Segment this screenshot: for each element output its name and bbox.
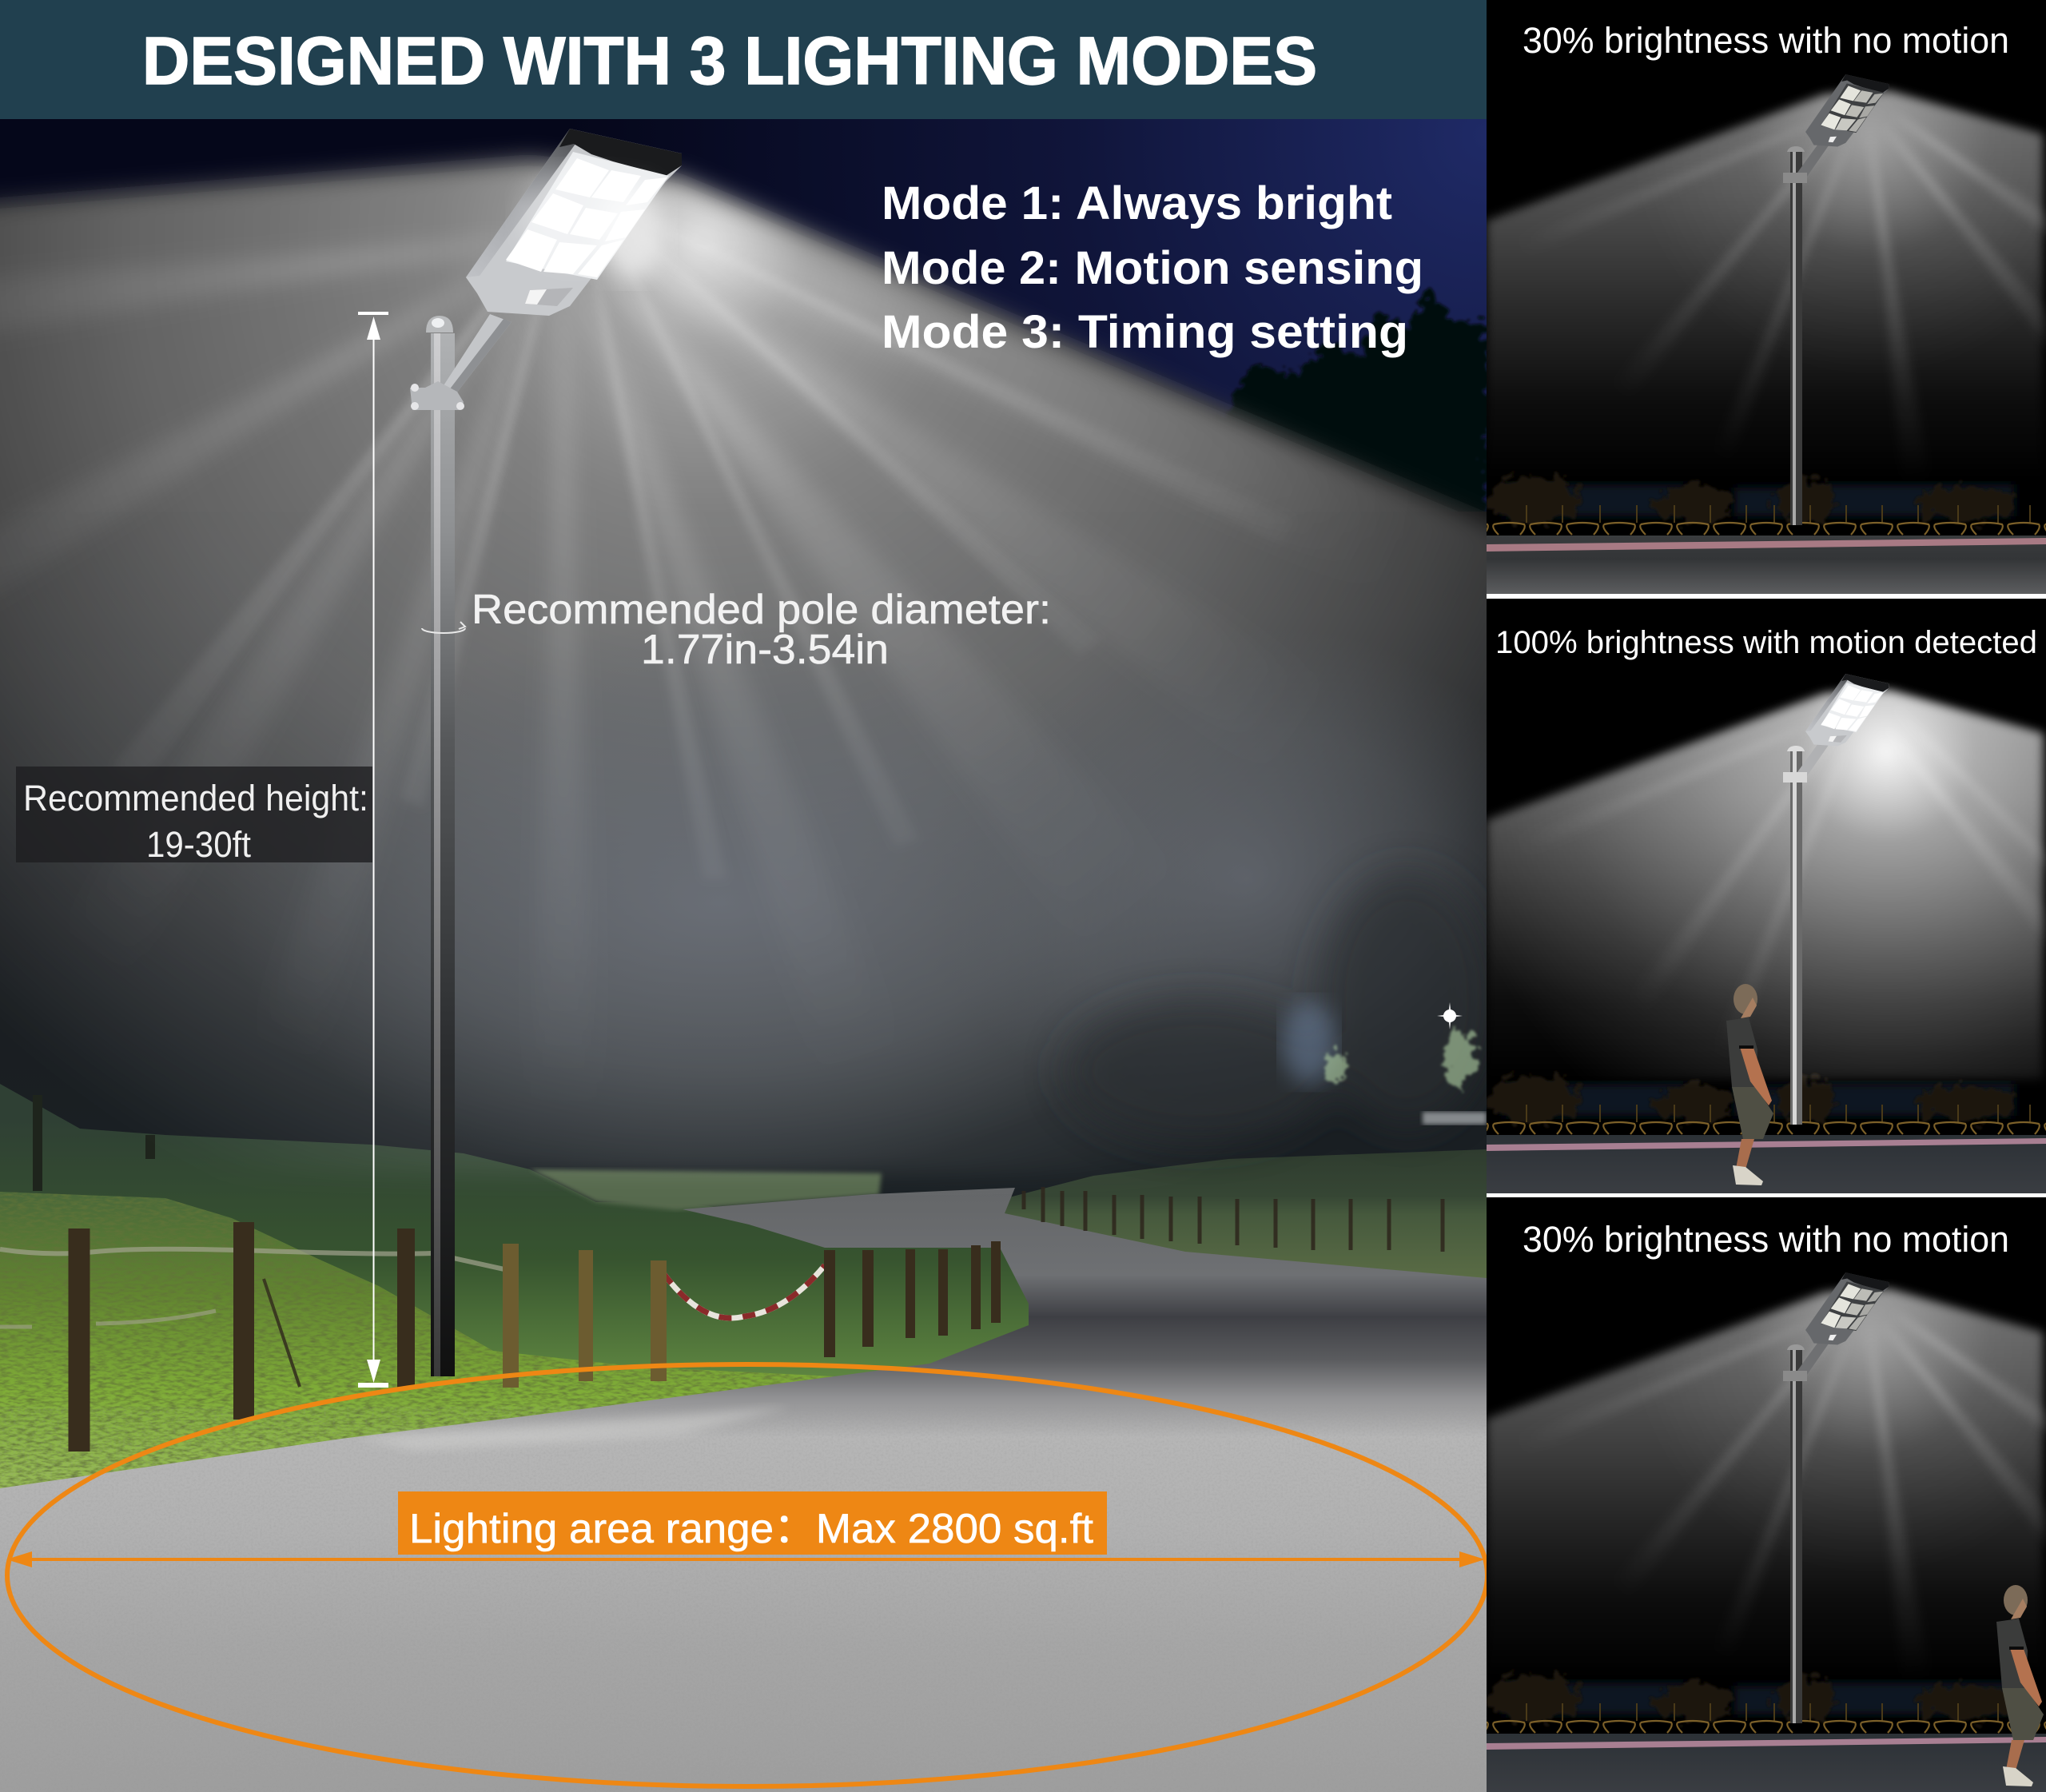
title: DESIGNED WITH 3 LIGHTING MODES (142, 23, 1317, 98)
shoreline and fence (1487, 1674, 2046, 1734)
lamp (1805, 1272, 1889, 1344)
left fence posts and ropes (0, 1222, 996, 1452)
label text: Lighting area range：Max 2800 sq.ft (409, 1506, 1094, 1552)
distant tree trunks (38, 1095, 150, 1191)
street lamp (466, 129, 682, 316)
tree silhouettes (1228, 286, 1487, 512)
height callout (16, 767, 372, 865)
height value: 19-30ft (146, 824, 251, 865)
pink road strip (1487, 1138, 2046, 1151)
mode 1: Mode 1: Always bright (882, 177, 1392, 229)
road (0, 1188, 1487, 1792)
pole (426, 316, 455, 1376)
left foreground grass bank (0, 1192, 834, 1491)
pole diameter callout (422, 587, 1051, 673)
label box (398, 1491, 1107, 1555)
caption: middle panel: 100% brightness with motion detected (1495, 625, 2037, 660)
back grass hills (0, 1084, 1029, 1379)
lighting area width arrow (6, 1551, 1485, 1567)
pole (1783, 141, 1829, 525)
rays (1439, 1310, 2046, 1682)
right fence (1024, 1187, 1443, 1252)
pole (1783, 740, 1829, 1125)
background (1487, 0, 2046, 594)
dark base under the light cone (0, 166, 1487, 512)
light cone (1487, 1289, 2043, 1678)
height label: Recommended height: (23, 778, 368, 818)
glow (1487, 1289, 2043, 1678)
background (1487, 599, 2046, 1193)
lighting modes list (882, 177, 1423, 358)
light cone (1487, 91, 2043, 480)
mode 2: Mode 2: Motion sensing (882, 242, 1423, 294)
lamp (1805, 74, 1889, 146)
height dimension arrow (358, 312, 388, 1388)
lighting area label (398, 1491, 1107, 1555)
person leaving in panel 3 (1996, 1585, 2044, 1786)
road (1487, 536, 2046, 594)
pink road strip (1487, 1737, 2046, 1750)
panel: mode 30% no motion (top) (1439, 0, 2046, 594)
caption: top panel: 30% brightness with no motion (1523, 20, 2009, 61)
grass texture (0, 1192, 834, 1491)
road (1487, 1135, 2046, 1193)
caption: bottom panel: 30% brightness with no motion (1523, 1219, 2009, 1260)
pole (1783, 1339, 1829, 1723)
glow (1487, 91, 2043, 480)
road (1487, 1734, 2046, 1792)
pink road strip (1487, 538, 2046, 552)
blue glow (1282, 1001, 1336, 1084)
header banner (0, 0, 1487, 119)
panel: mode 30% no motion (bottom) (1439, 1198, 2046, 1792)
lamp (1805, 674, 1889, 746)
far lit meadow (530, 1169, 882, 1210)
road grain (0, 1407, 1487, 1792)
panel: mode 100% with motion (1439, 599, 2046, 1193)
pole diameter value: 1.77in-3.54in (641, 627, 889, 673)
white divider (1487, 594, 2046, 599)
shoreline and fence (1487, 476, 2046, 536)
far road (1423, 1112, 1487, 1125)
night sky (0, 119, 1487, 512)
white divider (1487, 1193, 2046, 1197)
light cone (0, 160, 1598, 1183)
bright glow (1487, 691, 2043, 1079)
mode 3: Mode 3: Timing setting (882, 306, 1408, 358)
background (1487, 1198, 2046, 1792)
panel: main lighting scene (0, 119, 1614, 1792)
light cone (1487, 691, 2043, 1079)
hazy tree mass (1063, 871, 1495, 1143)
rays (1439, 703, 2046, 1095)
right grass hill (1005, 1149, 1487, 1278)
lighting area ellipse (7, 1364, 1487, 1786)
lamp bloom (519, 168, 663, 280)
rotation ring icon (422, 622, 465, 633)
shoreline and fence (1487, 1075, 2046, 1135)
distant trees and street light (1063, 871, 1495, 1143)
person walking in panel 2 (1726, 984, 1773, 1185)
rays (1439, 112, 2046, 484)
pole diameter label: Recommended pole diameter: (472, 587, 1051, 633)
light star (1437, 1002, 1463, 1029)
label background (16, 767, 372, 862)
light rays (0, 212, 1614, 1159)
bright road patch (360, 1407, 791, 1451)
misty background forest (0, 512, 1487, 1231)
lit foliage (1326, 1030, 1475, 1088)
lamp mounting arm and clamp (410, 314, 512, 410)
sharp light rays (112, 216, 1295, 879)
